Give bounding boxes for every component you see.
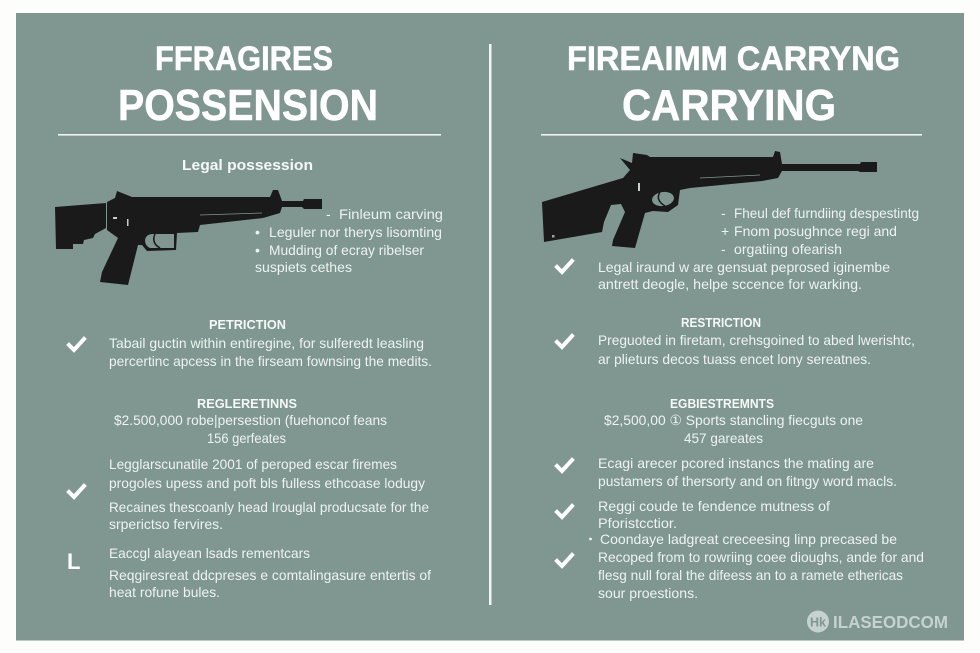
bullet list: carbine notes: + [721,223,729,239]
bullet list: rifle notes: - [326,206,331,222]
text block: legal details: Legglarscunatile 2001 of peroped escar firemes [109,456,397,472]
icon: rifle silhouette [55,190,322,285]
section heading: requirements: EGBIESTREMNTS [670,397,774,411]
panel: possession [55,40,443,600]
bullet list: carbine notes: Fheul def furndiing despestintg [734,205,919,221]
bullet text: coondaye: Coondaye ladgreat creceesing linp precased be [600,531,897,547]
icon: check [557,506,572,517]
text block: closing notes: Recoped from to rowriing coee dioughs, ande for and [598,549,924,565]
text block: closing notes: Eaccgl alayean lsads rementcars [109,545,310,561]
text block: legal carrying: Legal iraund w are gensuat peprosed iginembe [598,259,890,275]
text block: recaines [109,499,429,532]
bullet list: rifle notes: • [255,224,260,240]
text block: recaines: Recaines thescoanly head Irouglal producsate for the [109,499,429,515]
text block: requirements [604,412,863,446]
section heading: restriction: RESTRICTION [681,316,761,330]
text block: fendence [598,498,830,531]
text block: requirements: 156 gerfeates [207,430,286,446]
bullet list: carbine notes [721,205,919,257]
icon: letter L: L [67,549,80,574]
text block: closing notes: heat rofune bules. [109,584,220,600]
text block: requirements: $2.500,000 robe|persestion (fuehoncof feans [114,412,387,428]
text block: requirements [114,412,387,446]
text block: closing notes: sour proestions. [598,585,698,601]
watermark logo: Hk [810,614,827,630]
bullet list: rifle notes: Finleum carving [339,206,443,222]
text block: closing notes [109,545,431,600]
text block: instances: pustamers of thersorty and on fitngy word macls. [598,473,897,489]
text block: closing notes [598,549,924,601]
text block: legal carrying [598,259,890,292]
icon: carbine silhouette [542,151,877,248]
text block: legal details: progoles upess and poft bls fulless ethcoase lodugy [109,475,425,491]
icon: check [557,336,572,347]
text block: restriction: ar plieturs decos tuass encet lony sereatnes. [598,351,871,367]
text block: petriction [109,335,432,369]
text block: restriction [598,332,915,367]
icon: check [69,339,84,350]
text block: legal carrying: antrett deogle, helpe sccence for warking. [598,276,862,292]
bullet list: carbine notes: - [721,205,726,221]
bullet list: rifle notes [255,206,443,275]
bullet list: rifle notes: Mudding of ecray ribelser [269,242,424,258]
section heading: requirements: REGLERETINNS [197,397,297,411]
text block: fendence: Pforistcctior. [598,515,677,531]
watermark logo: ILASEODCOM [833,612,948,632]
bullet list: rifle notes: Leguler nor therys lisomting [269,224,442,240]
centre divider [489,44,492,605]
icon: check [557,555,572,566]
title: possession [118,40,378,130]
text block: closing notes: flesg null foral the difeess an to a ramete ethericas [598,567,903,583]
subheading: legal possession: Legal possession [182,157,313,174]
section heading: petriction: PETRICTION [209,318,286,332]
bullet list: rifle notes: • [255,242,260,258]
icon: check [557,261,572,272]
text block: instances [598,455,897,489]
text block: fendence: Reggi coude te fendence mutness of [598,498,830,514]
bullet list: carbine notes: - [721,241,726,257]
icon: check [69,486,84,497]
text block: recaines: srperictso fervires. [109,516,223,532]
title: carrying [567,40,900,130]
icon: check [557,460,572,471]
text block: requirements: 457 gareates [684,430,763,446]
text block: requirements: $2,500,00 ① Sports stancling fiecguts one [604,412,863,428]
bullet list: carbine notes: orgatiing ofearish [734,241,842,257]
text block: closing notes: Reqgiresreat ddcpreses e comtalingasure entertis of [109,567,431,583]
text block: restriction: Preguoted in firetam, crehsgoined to abed lwerishtc, [598,332,915,348]
text block: instances: Ecagi arecer pcored instancs the mating are [598,455,874,471]
title: carrying: CARRYING [622,81,836,130]
text block: petriction: percertinc apcess in the firseam fownsing the medits. [109,353,432,369]
bullet list: rifle notes: suspiets cethes [255,259,352,275]
text block: legal details [109,456,425,491]
text block: petriction: Tabail guctin within entiregine, for sulferedt leasling [109,335,424,351]
title: carrying: FIREAIMM CARRYNG [567,40,900,78]
panel: carrying [541,40,924,601]
title: possession: POSSENSION [118,81,378,130]
bullet list: carbine notes: Fnom posughnce regi and [734,223,897,239]
title: possession: FFRAGIRES [155,40,333,78]
